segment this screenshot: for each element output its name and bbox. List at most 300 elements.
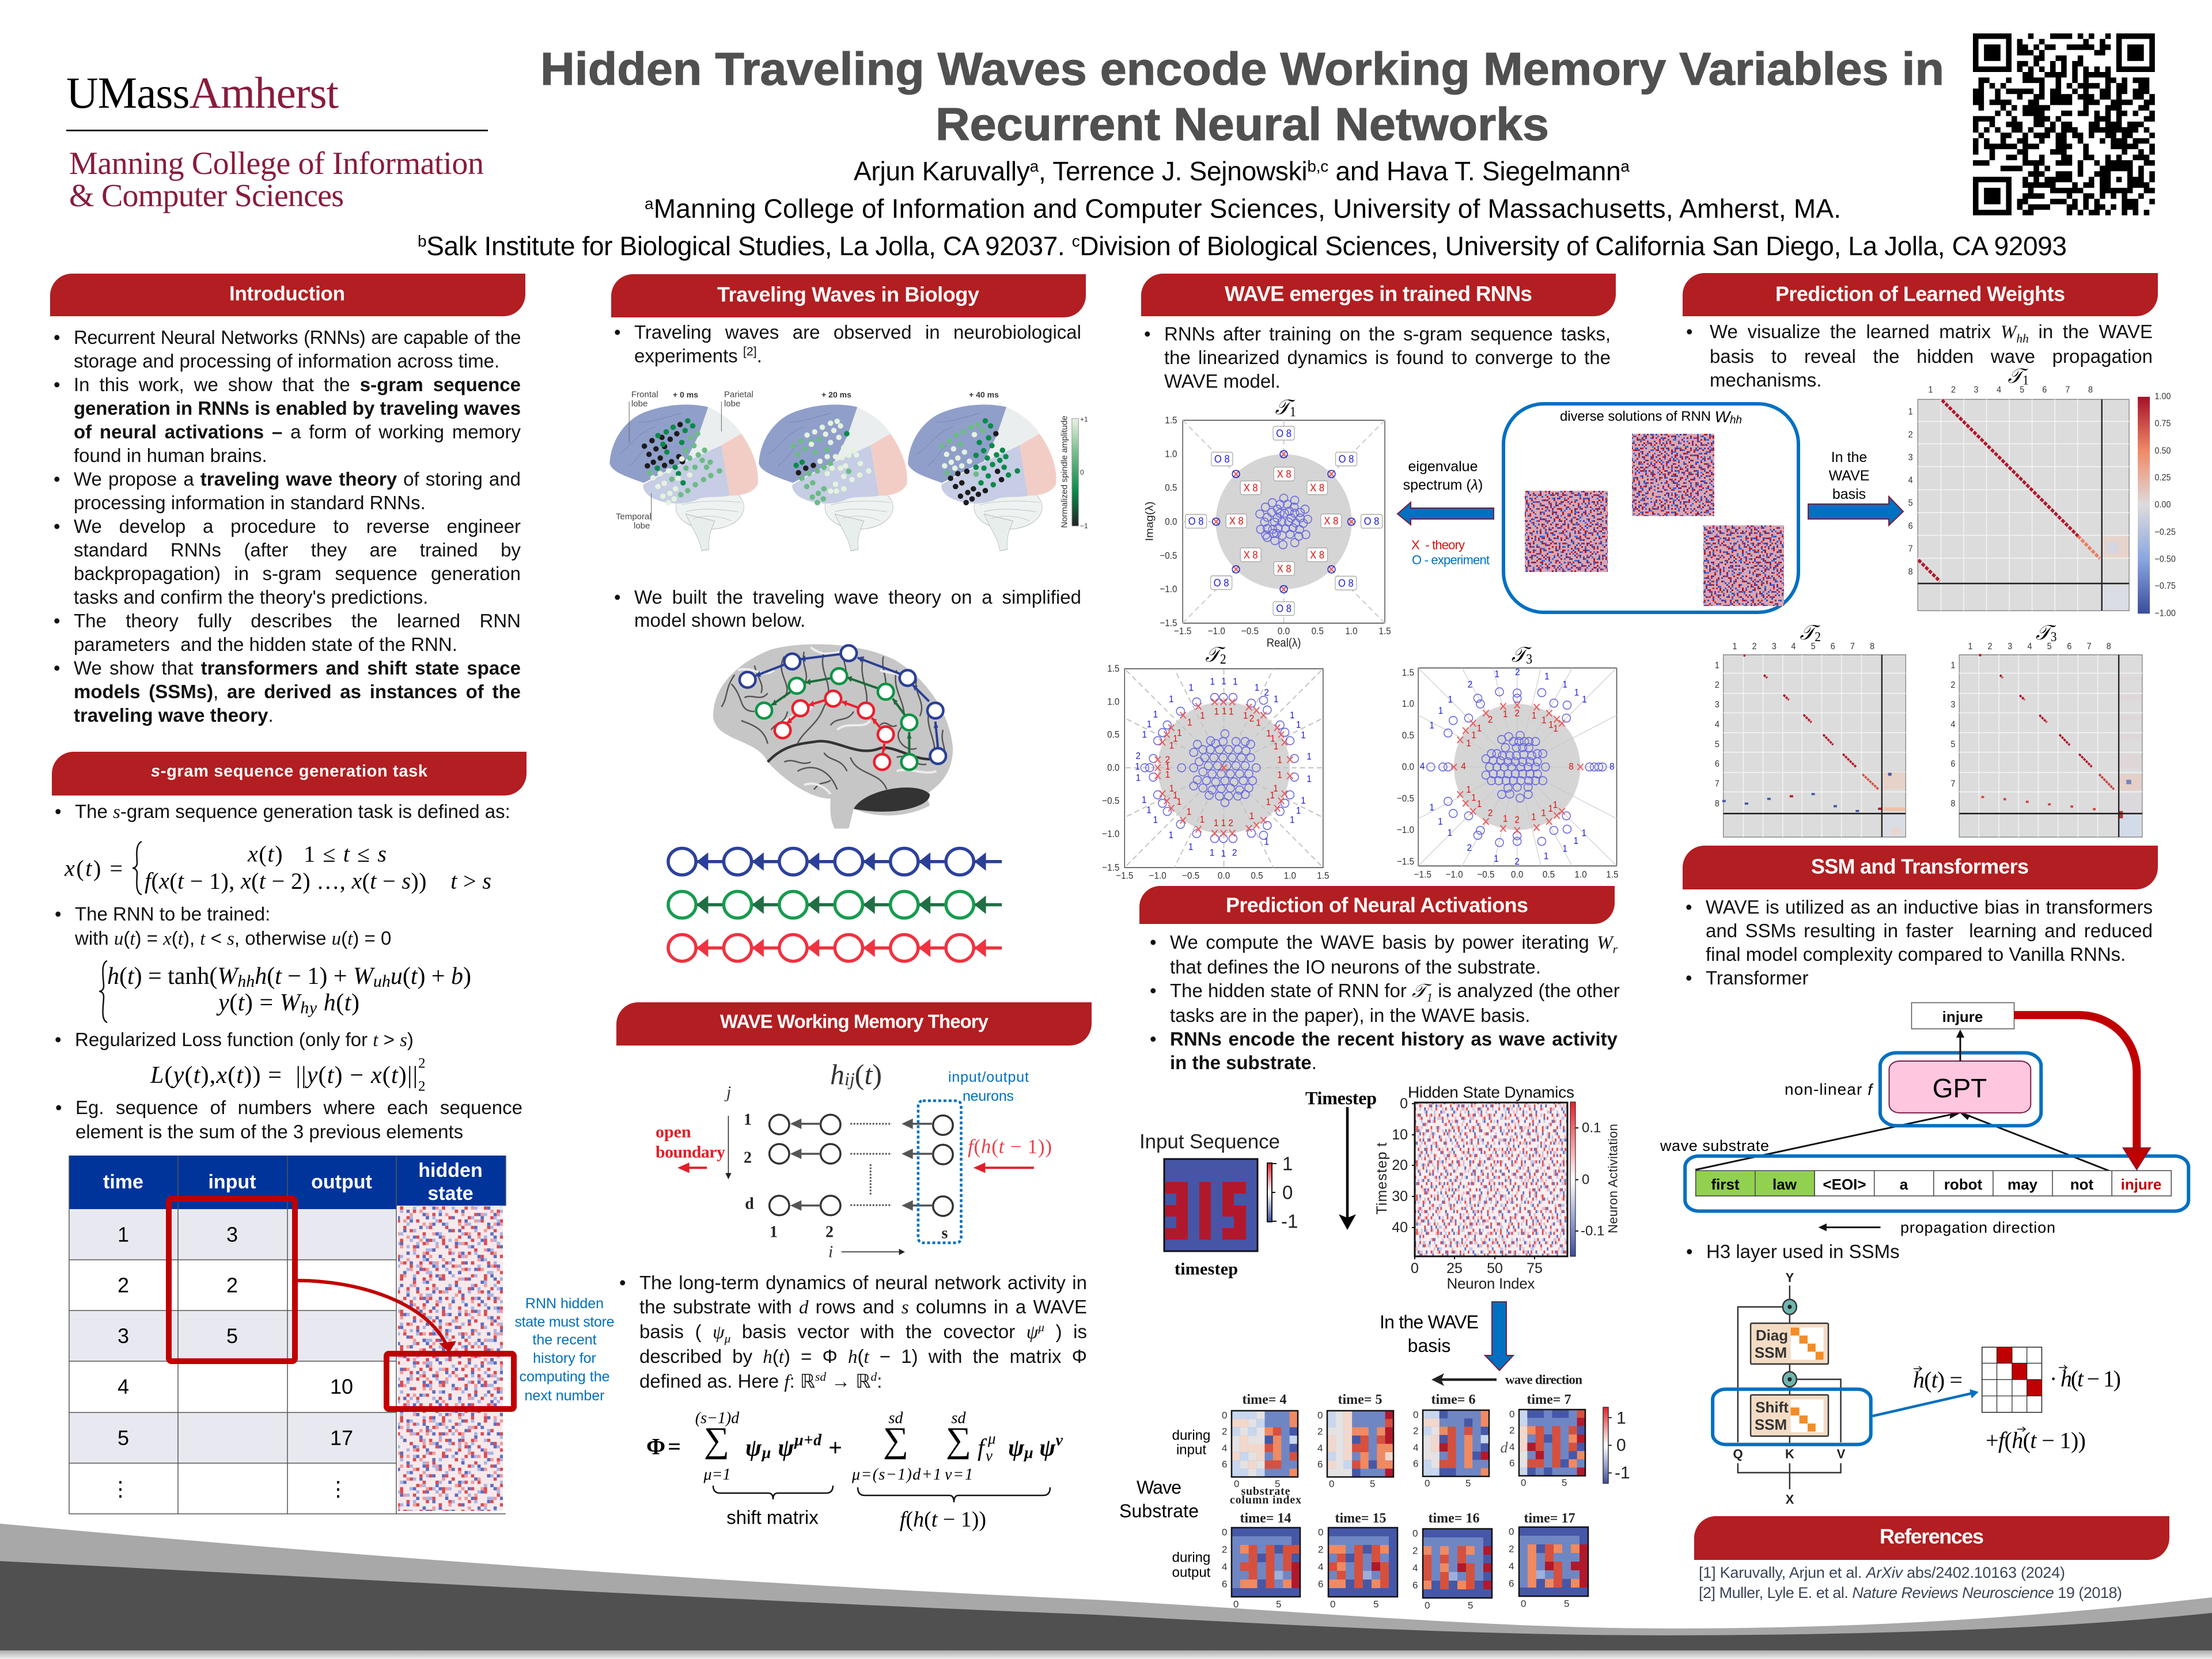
chart: weight matrix T2: 8 [1870,642,1874,652]
heatmap: hidden state dynamics: Hidden State Dynamics [1408,1083,1574,1101]
heatmap: time 6: time= 6 [1431,1392,1475,1407]
text block: simplified model: We built the traveling wave theory on a simplified [634,586,1081,608]
chart: eigenvalue spectrum T1: 1.0 [1165,449,1177,460]
diagram: WAVE substrate rows and columns [656,1058,1052,1262]
diagram: H3 layer with Diag and Shift SSM: SSM [1755,1344,1787,1361]
arrow: wave direction: wave direction [1505,1372,1582,1387]
chart: eigenvalue spectrum T3: 1.5 [1402,668,1414,678]
diagram: H3 layer with Diag and Shift SSM: SSM [1755,1416,1787,1433]
chart: eigenvalue spectrum T1: 0.0 [1278,626,1290,637]
diagram: GPT transformer wave substrate: propagation direction [1900,1219,2055,1236]
figure: traveling waves on brain lobes: + 0 ms [673,390,698,399]
figure: traveling waves on brain lobes: −1 [1080,522,1088,530]
diagram: GPT transformer wave substrate: non-linear f [1785,1081,1874,1098]
chart: weight matrix T1: −0.25 [2154,528,2176,537]
chart: eigenvalue spectrum T1: O 8 [1188,515,1203,527]
equation: loss function [150,1055,425,1094]
text block: learned weights: We visualize the learned matrix Whh in the WAVE [1710,321,2153,346]
chart: eigenvalue spectrum T2: 𝒯 [1205,643,1220,666]
logo: UMass Amherst and college name [66,68,488,214]
text block: introduction bullets: We develop a procedure to reverse engineer [74,516,521,537]
callout: RNN hidden state note: RNN hidden [525,1296,604,1312]
diagram: WAVE substrate rows and columns: 1 [744,1111,752,1129]
diagram: WAVE substrate rows and columns: j [724,1083,731,1101]
text block: SSM and transformers: and SSMs resulting in faster learning and reduced [1706,920,2153,941]
wave substrate side labels: 1 [1616,1409,1626,1427]
table: time, input, output, hidden state: 1 [118,1222,129,1247]
equation: shift matrix update: +f(h(t − 1)) [1986,1427,2086,1453]
equation: matrix Phi: ψ [1008,1435,1024,1461]
chart: weight matrix T3: 1 [1968,642,1972,652]
chart: eigenvalue spectrum T2 [1102,643,1330,881]
heatmap: time 7: time= 7 [1527,1392,1571,1407]
chart: weight matrix T2: 6 [1831,642,1835,652]
text block: RNNs after training [1145,323,1611,392]
heading: SSM and Transformers: SSM and Transformers [1811,855,2029,878]
chart: weight matrix T2: 6 [1715,760,1719,769]
heatmap: input sequence 315: -1 [1281,1211,1298,1232]
callout: RNN hidden state note: the recent [532,1332,597,1348]
chart: eigenvalue spectrum T3: 3 [1526,651,1532,666]
chart: eigenvalue spectrum T3: 1211112111481112121111 [1420,666,1615,867]
text block: introduction bullets: tasks and confirm the theory's predictions. [74,586,428,608]
chart: eigenvalue spectrum T1 [1143,396,1391,650]
chart: eigenvalue spectrum T3: 1.5 [1606,869,1619,880]
table: time, input, output, hidden state: hidden [418,1160,483,1181]
text block: RNNs after training: the linearized dynamics is found to converge to the [1164,347,1611,368]
text block: RNN to be trained: The RNN to be trained: [75,903,270,925]
heatmap: hidden state dynamics: 75 [1527,1260,1543,1277]
diagram: GPT transformer wave substrate [1660,1003,2188,1236]
heading: s-gram sequence generation task [52,752,527,796]
wave substrate side labels: Wave [1137,1477,1181,1498]
equation: matrix Phi: sd [952,1409,966,1427]
equation: RNN system: y(t) = W [218,990,300,1016]
text block: prediction of neural activations: We compute the WAVE basis by power iterating Wr [1170,931,1618,956]
figure: traveling waves on brain lobes: Normalized spindle amplitude [1060,416,1069,528]
text block: example sequence: element is the sum of the 3 previous elements [75,1121,463,1142]
arrow: eigenvalue spectrum [1397,459,1494,567]
chart: weight matrix T2: 1 [1715,661,1719,671]
table: time, input, output, hidden state [69,1156,506,1514]
equation: matrix Phi: ∑ [946,1421,971,1460]
authors and affiliations [418,156,2067,261]
chart: weight matrix T2: 5 [1715,740,1719,749]
heatmap: input sequence 315 [1139,1130,1298,1279]
heatmap: time 6 [1413,1392,1489,1488]
references [1699,1564,2122,1601]
text block: prediction of neural activations: in the substrate. [1170,1052,1317,1073]
chart: weight matrix T3: 7 [2087,642,2092,652]
callout: RNN hidden state note: computing the [519,1369,610,1385]
table: time, input, output, hidden state: output [311,1171,372,1193]
wave substrate side labels: during [1172,1427,1210,1444]
text block: introduction bullets: models (SSMs), are derived as instances of the [74,681,521,702]
chart: weight matrix T2: 2 [1715,680,1719,690]
chart: eigenvalue spectrum T1: 0.0 [1165,516,1177,527]
chart: eigenvalue spectrum T2: 0.0 [1107,762,1119,773]
equation: RNN system: (t) [336,990,359,1016]
chart: weight matrix T3: 2 [1950,680,1955,690]
equation: RNN system: hh [237,971,255,991]
chart: eigenvalue spectrum T1: O 8 [1214,453,1230,465]
equation: matrix Phi: ∑ [883,1421,908,1460]
diagram: WAVE substrate rows and columns: ( [855,1058,864,1090]
diagram: H3 layer with Diag and Shift SSM: K [1785,1447,1794,1461]
arrow: timestep: Timestep [1305,1088,1377,1108]
chart: eigenvalue spectrum T1: −1.5 [1160,618,1177,628]
text block: introduction bullets: backpropagation) in s-gram sequence generation [74,563,521,584]
chart: eigenvalue spectrum T2: −1.5 [1116,870,1133,881]
equation: matrix Phi: μ=1 [703,1465,730,1484]
chart: eigenvalue spectrum T2: −1.5 [1102,862,1119,873]
chart: weight matrix T3: 3 [2051,629,2057,644]
text block: long-term dynamics: The long-term dynamics of neural network activity in [639,1272,1087,1293]
text block: introduction bullets: of neural activations – a form of working memory [74,421,521,442]
chart: eigenvalue spectrum T1: 1.0 [1345,626,1358,637]
callout: red highlight boxes and arrow [169,1199,514,1409]
diagram: WAVE substrate rows and columns: d [745,1195,754,1213]
diagram: WAVE substrate rows and columns: open [656,1122,691,1142]
equation: RNN system: (t − 1) + W [267,963,373,990]
heatmap: hidden state dynamics: -0.1 [1581,1224,1604,1238]
text block: learned weights: mechanisms. [1710,369,1821,391]
text block: introduction bullets: We propose a traveling wave theory of storing and [74,468,521,490]
diagram: GPT transformer wave substrate: first [1711,1176,1740,1193]
chart: weight matrix T1: 8 [2088,385,2093,395]
text block: SSM and transformers: WAVE is utilized as an inductive bias in transformers [1706,896,2153,918]
chart: eigenvalue spectrum T3: 1211112111481112121111 [1461,708,1574,825]
text block: introduction bullets: generation in RNNs is enabled by traveling waves [74,397,521,419]
text block: introduction bullets: standard RNNs (after they are trained by [74,539,521,560]
chart: eigenvalue spectrum T1: X 8 [1277,468,1291,480]
diagram: WAVE substrate rows and columns: 2 [744,1149,752,1167]
chart: eigenvalue spectrum T1: O 8 [1339,453,1354,465]
equation: s-gram definition: x(t) = [64,855,123,881]
chart: eigenvalue spectrum T1: 𝒯 [1275,396,1290,419]
equation: RNN system: h(t) = tanh(W [107,963,237,990]
text block: H3 layer: H3 layer used in SSMs [1706,1241,1900,1262]
text block: simplified model: model shown below. [634,609,805,631]
equation: matrix Phi: (s−1)d [695,1409,740,1427]
chart: weight matrix T1: 5 [2020,385,2024,395]
chart: eigenvalue spectrum T1: −1.0 [1160,584,1177,594]
wave substrate side labels: substrate [1241,1485,1290,1498]
chart: eigenvalue spectrum T1: X 8 [1310,482,1324,494]
chart: eigenvalue spectrum T3: 0.5 [1543,869,1555,880]
equation: matrix Phi: μ [987,1430,996,1447]
table: time, input, output, hidden state: ⋮ [110,1477,131,1500]
chart: eigenvalue spectrum T2: −1.0 [1102,828,1119,839]
callout: RNN hidden state note [515,1296,614,1404]
diagram: WAVE substrate rows and columns: s [942,1225,948,1242]
chart: weight matrix T3: 2 [1988,642,1993,652]
text block: prediction of neural activations: tasks are in the paper), in the WAVE basis. [1170,1005,1530,1026]
figure: traveling waves on brain lobes [609,389,1088,551]
chart: weight matrix T1: 0.00 [2154,501,2171,510]
heatmap: time 6: 024605 [1413,1409,1471,1488]
chart: weight matrix T1: 1.00 [2154,392,2171,402]
heatmap: input sequence 315: timestep [1175,1259,1238,1279]
text block: introduction bullets: The theory fully describes the learned RNN [74,610,521,631]
equation: matrix Phi: f [978,1435,987,1461]
chart: weight matrix T1: 0.75 [2154,419,2171,429]
chart: weight matrix T2: 4 [1715,720,1719,730]
text block: prediction of neural activations: RNNs encode the recent history as wave activity [1170,1028,1618,1050]
figure: traveling waves on brain lobes: lobe [724,399,740,409]
text block: prediction of neural activations: that defines the IO neurons of the substrate. [1170,956,1541,978]
text block: SSM and transformers: final model complexity compared to Vanilla RNNs. [1706,944,2126,965]
equation: shift matrix update: h(t) = [1913,1366,1963,1393]
chart: weight matrix T1: 6 [1908,522,1913,531]
chart: weight matrix T1: 𝒯 [2008,365,2022,388]
text block: traveling waves observed: experiments [2]. [634,344,762,366]
chart: eigenvalue spectrum T3: −1.5 [1397,856,1414,867]
text block: introduction bullets: processing information in standard RNNs. [74,492,426,513]
heading: Prediction of Learned Weights [1683,273,2158,316]
wave substrate side labels: d [1500,1439,1508,1456]
text block: SSM and transformers [1686,896,2153,988]
chart: eigenvalue spectrum T1: O 8 [1364,515,1379,527]
text block: SSM and transformers: Transformer [1706,967,1808,988]
logo: UMass Amherst and college name: Manning College of Information [69,146,484,181]
heatmap: input sequence 315: 0 [1282,1182,1293,1203]
equation: RNN system: u [391,963,403,990]
heatmap: input sequence 315: 1 [1282,1153,1293,1174]
chart: weight matrix T1 [1908,365,2176,618]
equation: RNN system: (t) + b) [403,963,471,990]
equation: matrix Phi: shift matrix [726,1507,819,1528]
heading: References: References [1880,1524,1984,1548]
diagram: WAVE substrate rows and columns: input/output [948,1069,1029,1085]
wave substrate side labels: 0 [1616,1435,1626,1455]
chart: eigenvalue spectrum T2: −0.5 [1182,870,1199,881]
chart: weight matrix T3: 8 [2107,642,2111,652]
table: time, input, output, hidden state: 17 [330,1426,353,1449]
heatmap: time 15: time= 15 [1335,1511,1386,1526]
table: time, input, output, hidden state: state [427,1183,474,1205]
heading: Prediction of Neural Activations [1139,886,1615,924]
wave substrate side labels: column index [1230,1494,1301,1506]
text block: s-gram task definition: The s-gram sequence generation task is defined as: [75,801,510,823]
table: time, input, output, hidden state: 5 [226,1324,238,1348]
heading: Introduction [50,274,525,316]
text block: regularized loss: Regularized Loss function (only for t > s) [75,1029,414,1051]
chart: weight matrix T1: 1 [1908,407,1913,417]
diagram: H3 layer with Diag and Shift SSM: X [1786,1492,1794,1507]
heatmap: hidden state dynamics: 0 [1411,1260,1419,1277]
equation: s-gram definition: x(t) 1 ≤ t ≤ s [247,841,387,866]
callout: RNN hidden state note: history for [533,1350,596,1366]
text block: learned weights [1687,321,2153,391]
diagram: H3 layer with Diag and Shift SSM: Diag [1756,1327,1788,1344]
chart: weight matrix T2: 3 [1715,700,1719,710]
equation: matrix Phi: ν [1056,1431,1063,1449]
text block: RNNs after training: WAVE model. [1164,370,1281,392]
chart: weight matrix T1: −0.50 [2154,555,2176,565]
diagram: WAVE substrate rows and columns: 2 [825,1224,834,1241]
arrow: timestep [1305,1088,1377,1230]
diagram: GPT transformer wave substrate: may [2008,1176,2038,1193]
text block: traveling waves observed [615,321,1081,366]
equation: RNN system: uh [373,971,391,991]
heatmap: time 4: 024605 [1222,1410,1280,1490]
equation: s-gram definition [64,841,491,895]
diagram: GPT transformer wave substrate: robot [1944,1176,1983,1193]
diagram: H3 layer with Diag and Shift SSM: Shift [1755,1399,1789,1416]
chart: eigenvalue spectrum T1: Imag(λ) [1143,501,1156,541]
arrow: in the WAVE basis, downward [1380,1302,1513,1370]
arrow: in the WAVE basis, downward: basis [1408,1335,1450,1356]
text block: long-term dynamics [620,1272,1087,1392]
chart: weight matrix T1: 1 [1928,385,1933,395]
equation: matrix Phi: sd [889,1409,903,1427]
text block: example sequence [56,1097,522,1142]
equation: matrix Phi: μ=(s−1)d+1 [851,1465,941,1484]
diagram: WAVE substrate rows and columns: boundary [656,1143,725,1161]
text block: RNN to be trained: with u(t) = x(t), t < s, otherwise u(t) = 0 [75,927,391,949]
chart: eigenvalue spectrum T1: 0.5 [1312,626,1324,637]
equation: matrix Phi: ν=1 [945,1465,973,1484]
heatmap: time 5: time= 5 [1338,1392,1382,1407]
text block: long-term dynamics: the substrate with d rows and s columns in a WAVE [639,1296,1087,1318]
arrow: in the WAVE basis: In the [1831,449,1867,465]
text block: learned weights: basis to reveal the hidden wave propagation [1710,346,2153,367]
chart: eigenvalue spectrum T2: −1.0 [1149,870,1166,881]
heatmap: hidden state dynamics: 10 [1392,1127,1408,1143]
diagram: WAVE substrate rows and columns: 1 [770,1224,778,1241]
diagram: WAVE substrate rows and columns: h [830,1058,844,1090]
chart: weight matrix T2: 𝒯 [1800,622,1815,644]
figure: traveling waves on brain lobes: Frontal [631,389,658,400]
heatmap: hidden state [398,1206,503,1511]
chart: eigenvalue spectrum T1: −1.5 [1174,626,1191,637]
diagram: GPT transformer wave substrate: injure [1942,1008,1983,1025]
chart: eigenvalue spectrum T3: 1.0 [1574,869,1587,880]
heatmap: time 15: 024605 [1318,1527,1378,1609]
chart: eigenvalue spectrum T1: −0.5 [1241,626,1259,637]
text block: prediction of neural activations [1150,931,1620,1073]
chart: eigenvalue spectrum T3: 𝒯 [1512,643,1526,666]
heading: s-gram sequence generation task: s-gram sequence generation task [151,762,428,781]
arrow: eigenvalue spectrum: X - theory [1411,538,1465,552]
chart: eigenvalue spectrum T2: 1.0 [1107,696,1119,707]
chart: weight matrix T1: 1 [2022,373,2029,387]
figure: traveling waves on brain lobes: lobe [631,399,647,409]
equation: matrix Phi: f(h(t − 1)) [900,1508,986,1532]
heatmap: hidden state dynamics [1374,1083,1620,1292]
chart: weight matrix T3: 3 [2008,642,2012,652]
chart: eigenvalue spectrum T1: X 8 [1324,515,1338,527]
chart: eigenvalue spectrum T1: −0.5 [1160,550,1177,561]
arrow: eigenvalue spectrum: spectrum (λ) [1403,477,1483,493]
heading: WAVE Working Memory Theory: WAVE Working Memory Theory [720,1010,989,1032]
figure: traveling waves on brain lobes: 0 [1080,468,1084,476]
equation: matrix Phi: μ [1023,1444,1033,1462]
chart: weight matrix T1: 5 [1908,499,1913,508]
figure: traveling waves on brain lobes: + 20 ms [821,390,851,399]
chart: eigenvalue spectrum T2: 0.0 [1218,870,1230,881]
equation: RNN system [99,961,471,1022]
figure: brain with three wave chains [668,644,1002,961]
table: time, input, output, hidden state: 2 [118,1273,129,1297]
heading: References [1694,1516,2169,1560]
authors and affiliations: aManning College of Information and Computer Sciences, University of Massachusetts, Amherst, MA. [645,194,1841,224]
chart: weight matrix T3: 6 [1950,760,1955,769]
heatmap: hidden state dynamics: 0 [1582,1172,1589,1188]
heading: Prediction of Neural Activations: Prediction of Neural Activations [1226,893,1528,917]
diagram: GPT transformer wave substrate: law [1772,1176,1797,1193]
heatmap: hidden state dynamics: Timestep t [1374,1142,1390,1214]
text block: introduction bullets: found in human brains. [74,445,267,466]
equation: loss function: L(y(t),x(t)) = ||y(t) − x(t)|| [150,1062,418,1089]
equation: matrix Phi: ν [986,1447,993,1464]
chart: weight matrix T3: 1 [1950,661,1955,671]
heatmap: time 7 [1509,1392,1585,1488]
chart: eigenvalue spectrum T1: O 8 [1276,603,1291,615]
chart: weight matrix T1: −0.75 [2154,582,2176,591]
diagram: GPT transformer wave substrate: <EOI> [1823,1176,1866,1193]
chart: eigenvalue spectrum T3: 0.5 [1402,730,1414,741]
text block: introduction bullets: parameters and the hidden state of the RNN. [74,634,457,655]
chart: eigenvalue spectrum T2: −0.5 [1102,796,1119,806]
text block: introduction bullets: In this work, we show that the s-gram sequence [74,374,521,395]
figure: traveling waves on brain lobes: + 40 ms [969,390,999,399]
heatmap: time 4 [1222,1392,1298,1490]
text block: long-term dynamics: described by h(t) = Φ h(t − 1) with the matrix Φ [639,1346,1087,1368]
chart: eigenvalue spectrum T3: 0.0 [1511,869,1523,880]
heatmap: hidden state dynamics: 0.1 [1582,1120,1601,1136]
heatmap: time 5: 024605 [1317,1410,1375,1490]
heatmap: time 4: time= 4 [1243,1392,1286,1407]
equation: RNN system: h [255,963,267,990]
title [540,43,1944,150]
heatmap: time 17 [1509,1511,1588,1609]
chart: eigenvalue spectrum T3: −0.5 [1397,793,1414,804]
diagram: H3 layer with Diag and Shift SSM: V [1837,1447,1846,1461]
chart: eigenvalue spectrum T2: 0.5 [1251,870,1263,881]
equation: matrix Phi: Φ = [646,1433,681,1460]
chart: weight matrix T2: 1 [1733,642,1737,652]
chart: weight matrix T2: 5 [1811,642,1816,652]
chart: eigenvalue spectrum T1: O 8 [1214,577,1229,589]
diagram: GPT transformer wave substrate: injure [2121,1176,2161,1193]
table: time, input, output, hidden state: input [208,1171,256,1193]
references: [1] Karuvally, Arjun et al. ArXiv abs/2402.10163 (2024) [1699,1564,2065,1581]
chart: eigenvalue spectrum T1: 1.5 [1378,626,1391,637]
heading: Introduction: Introduction [229,282,345,305]
heatmap: time 14: 024605 [1222,1527,1281,1609]
chart: eigenvalue spectrum T1: 1 [1290,404,1296,419]
equation: matrix Phi: ψ [1033,1435,1056,1461]
chart: weight matrix T2: 3 [1772,642,1777,652]
arrow: in the WAVE basis [1808,449,1903,525]
chart: eigenvalue spectrum T2: 1.0 [1284,870,1296,881]
equation: RNN system: h [317,990,336,1016]
heatmap: hidden state dynamics: 20 [1392,1157,1408,1173]
text block: long-term dynamics: defined as. Here f: ℝsd → ℝd: [639,1370,882,1392]
diagram: GPT transformer wave substrate: not [2070,1176,2094,1193]
chart: eigenvalue spectrum T3: 0.0 [1402,762,1414,772]
arrow: eigenvalue spectrum: eigenvalue [1408,459,1478,475]
heatmap: time 17: 024605 [1509,1527,1569,1609]
text block: introduction bullets: traveling wave theory. [74,704,274,726]
chart: weight matrix T3: 5 [2047,642,2052,652]
table: time, input, output, hidden state: 3 [118,1324,129,1348]
wave substrate side labels: during [1172,1550,1210,1566]
diagram: WAVE substrate rows and columns: i [828,1242,833,1262]
figure: traveling waves on brain lobes: Temporal [616,512,652,522]
